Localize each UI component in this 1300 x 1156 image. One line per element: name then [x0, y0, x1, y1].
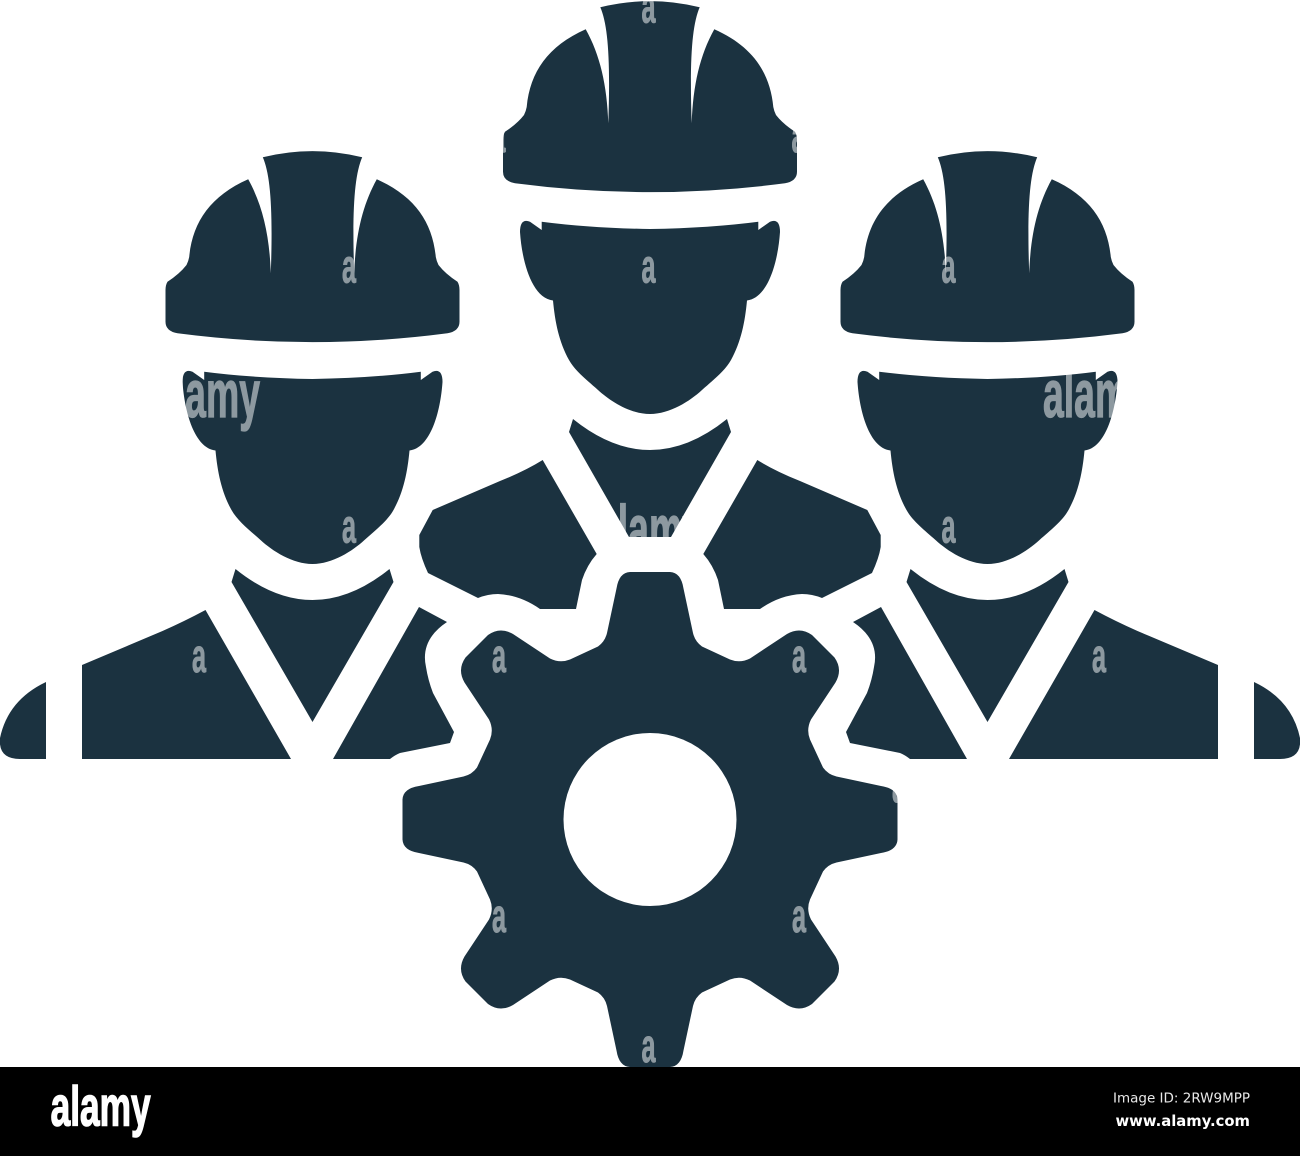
watermark: alamy letters over the icon: a [492, 109, 506, 162]
watermark: alamy letters over the icon [154, 0, 1149, 1072]
watermark: alamy letters over the icon: a [792, 629, 806, 682]
watermark: alamy letters over the icon: a [942, 240, 956, 292]
watermark: alamy letters over the icon: a [492, 889, 506, 942]
worker: center [419, 1, 881, 609]
watermark: alamy letters over the icon: a [642, 240, 656, 292]
watermark: alamy letters over the icon: a [492, 629, 506, 682]
watermark: alamy letters over the icon: a [792, 109, 806, 162]
watermark: alamy letters over the icon: a [892, 759, 906, 812]
watermark: alamy letters over the icon: alamy [597, 492, 703, 567]
watermark: alamy letters over the icon: a [342, 240, 356, 292]
worker: left [0, 151, 459, 759]
watermark: alamy letters over the icon: a [1092, 629, 1106, 682]
footer image id: Image ID: 2RW9MPP [1113, 1092, 1250, 1107]
footer url: www.alamy.com [1116, 1112, 1250, 1130]
watermark: alamy letters over the icon: a [792, 889, 806, 942]
watermark: alamy letters over the icon: a [942, 500, 956, 552]
watermark: alamy letters over the icon: a [192, 629, 206, 682]
footer bar [0, 1067, 1300, 1156]
worker: right [840, 151, 1300, 759]
watermark: alamy letters over the icon: a [342, 500, 356, 552]
watermark: alamy letters over the icon: alamy [154, 357, 260, 432]
footer logo: alamy: alamy [51, 1075, 151, 1138]
watermark: alamy letters over the icon: a [642, 1019, 656, 1072]
watermark: alamy letters over the icon: alamy [1043, 357, 1149, 432]
icon: gear [402, 572, 898, 1067]
